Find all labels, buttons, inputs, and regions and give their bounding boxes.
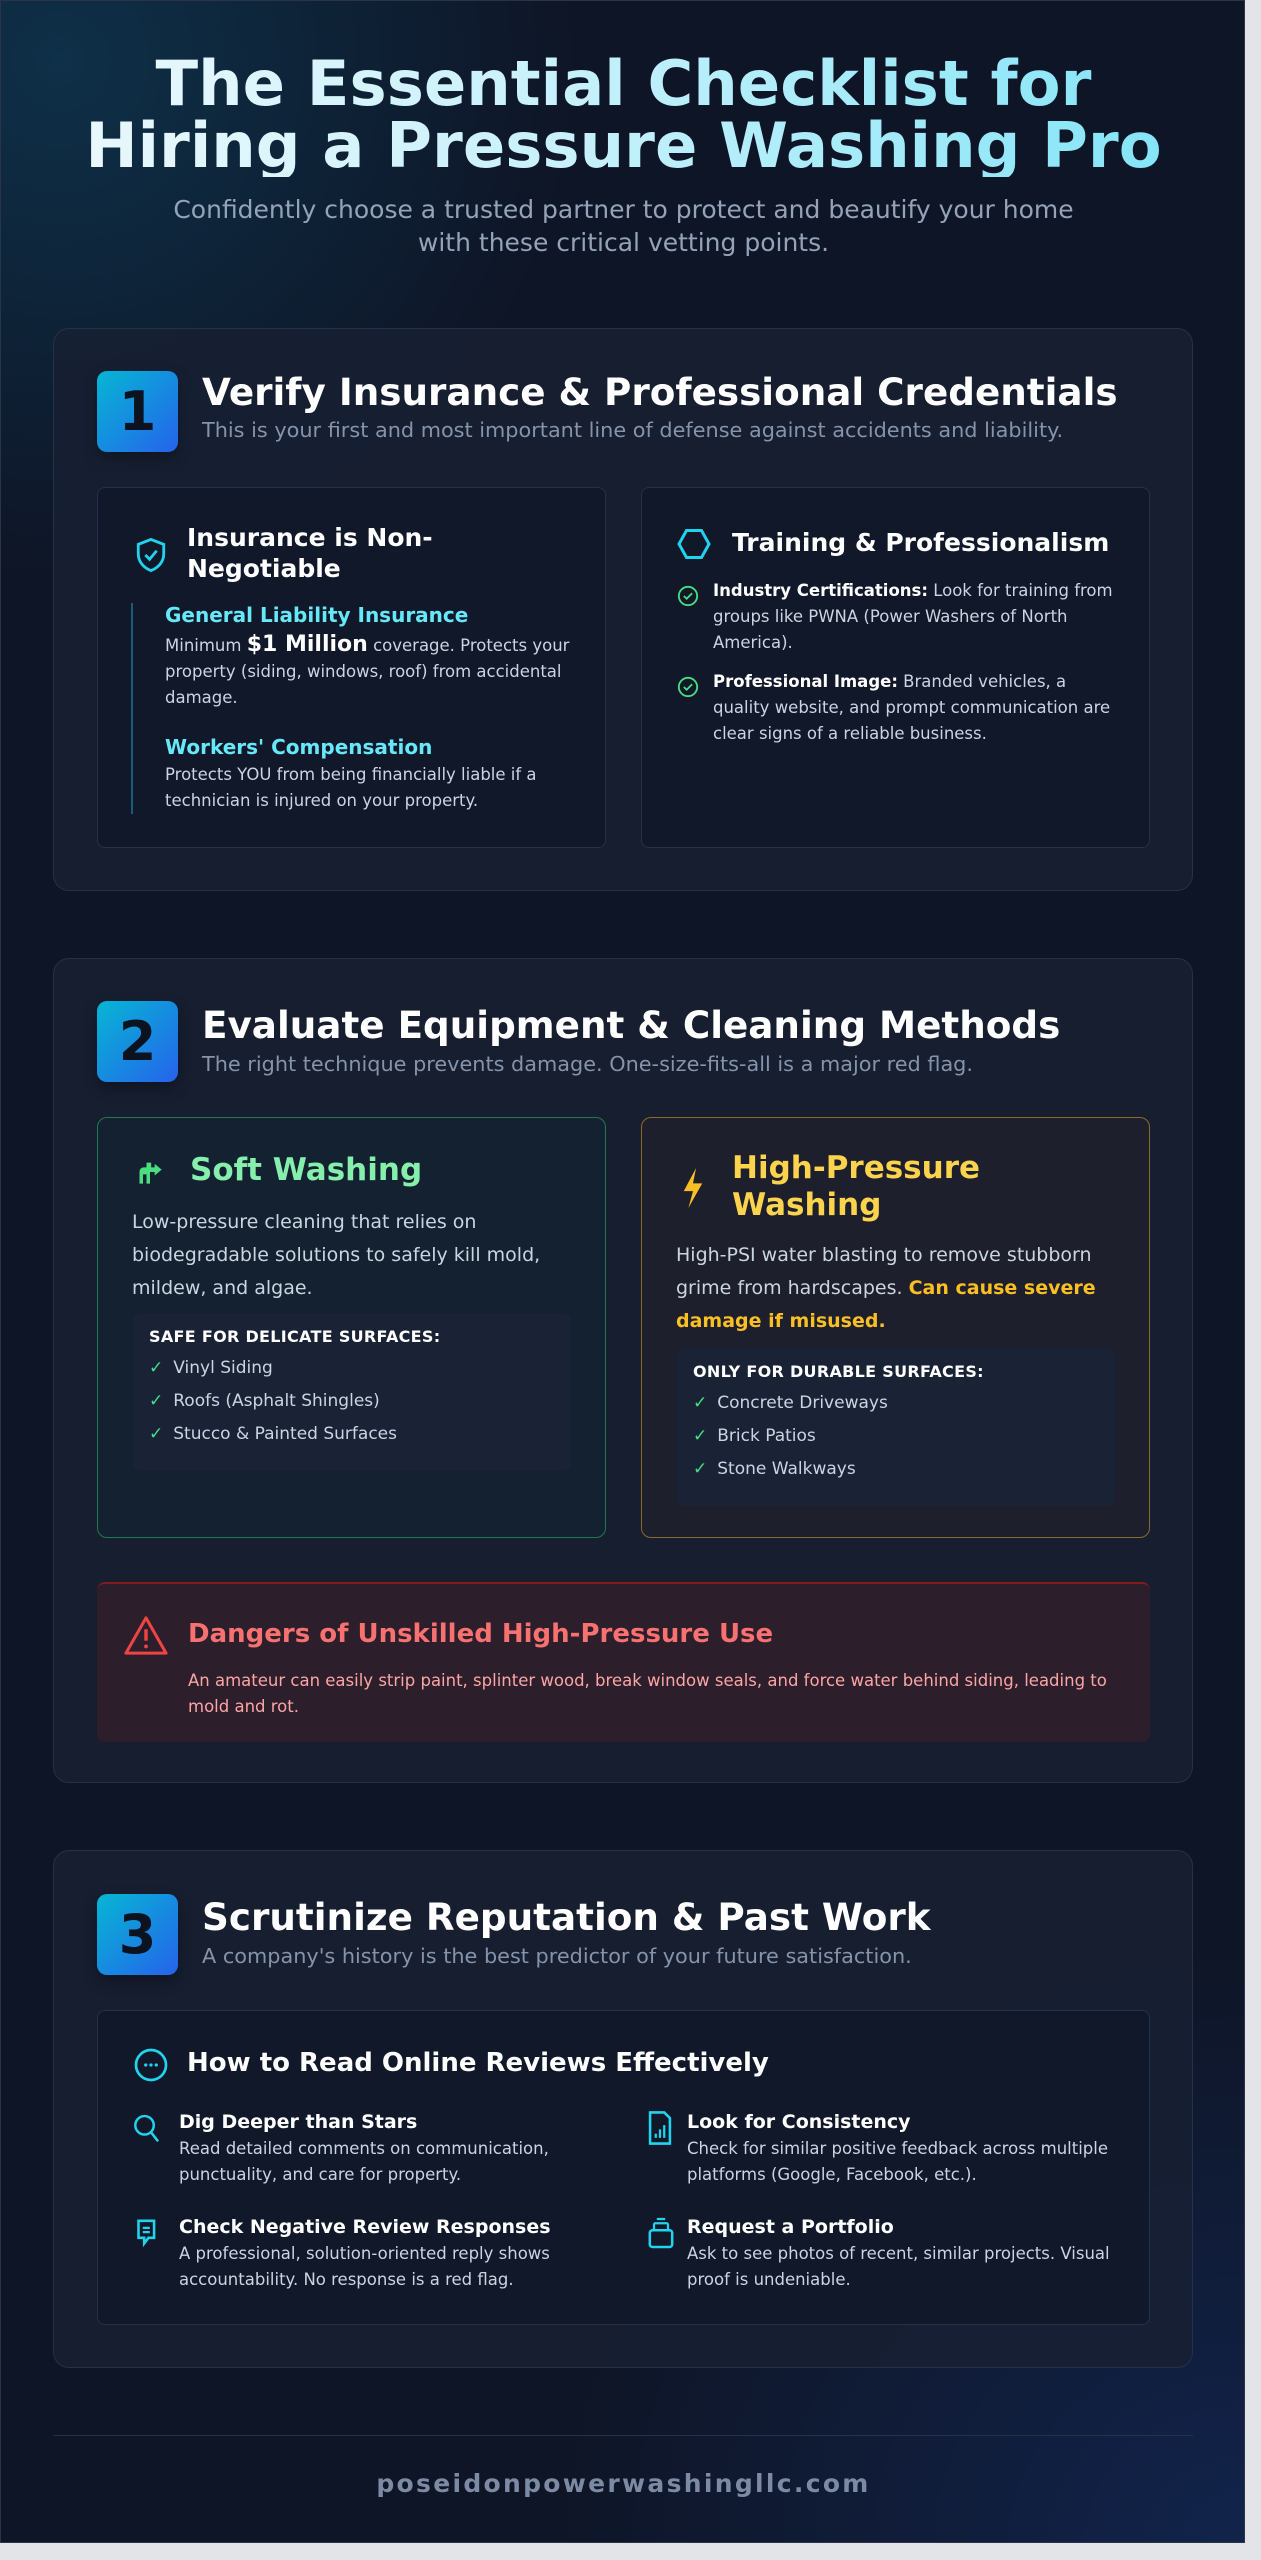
icon: soft wash bbox=[140, 1162, 162, 1184]
heading: high pressure: Washing bbox=[732, 1187, 881, 1223]
heading: high pressure: High-Pressure bbox=[732, 1150, 980, 1186]
list: durable surfaces: ✓ Concrete Driveways bbox=[693, 1393, 888, 1413]
heading: soft washing: Soft Washing bbox=[190, 1152, 422, 1188]
list: delicate surfaces bbox=[133, 1313, 571, 1471]
title: Hiring a Pressure Washing Pro bbox=[85, 109, 1162, 182]
text: workers comp bbox=[165, 735, 537, 810]
list: delicate surfaces: SAFE FOR DELICATE SURFACES: bbox=[149, 1327, 440, 1346]
panel: section 1 credentials bbox=[53, 328, 1193, 891]
item: dig deeper bbox=[134, 2111, 549, 2184]
footer url: poseidonpowerwashingllc.com bbox=[376, 2469, 871, 2498]
heading: reviews: How to Read Online Reviews Effectively bbox=[187, 2048, 769, 2078]
subtitle: Confidently choose a trusted partner to protect and beautify your home bbox=[173, 195, 1074, 224]
item: consistency: Look for Consistency bbox=[687, 2111, 911, 2133]
subheading 3: A company's history is the best predictor of your future satisfaction. bbox=[202, 1944, 912, 1968]
item: negative responses: A professional, solution-oriented reply shows accountability. No response is a red flag. bbox=[179, 2244, 550, 2289]
text: workers comp: Workers' Compensation bbox=[165, 735, 432, 759]
list: delicate surfaces: ✓ Roofs (Asphalt Shingles) bbox=[149, 1391, 380, 1411]
icon: lightning bbox=[684, 1168, 702, 1208]
subheading 1: This is your first and most important line of defense against accidents and liability. bbox=[202, 418, 1063, 442]
callout: dangers bbox=[97, 1582, 1150, 1742]
item: certifications: Industry Certifications: Look for training from groups like PWNA (Power Washers of North America). bbox=[713, 581, 1113, 652]
title bbox=[1, 53, 1246, 177]
list: delicate surfaces: ✓ Vinyl Siding bbox=[149, 1358, 273, 1378]
list: durable surfaces bbox=[677, 1348, 1115, 1506]
icon: shield bbox=[136, 538, 166, 572]
heading: insurance: Insurance is Non- bbox=[187, 523, 433, 552]
text: general liability: General Liability Insurance bbox=[165, 603, 468, 627]
item: professional image: Professional Image: Branded vehicles, a quality website, and prompt communication are clear signs of a reliable business. bbox=[713, 672, 1110, 743]
item: dig deeper: Read detailed comments on communication, punctuality, and care for property. bbox=[179, 2139, 549, 2184]
subheading 2: The right technique prevents damage. One-size-fits-all is a major red flag. bbox=[202, 1052, 973, 1076]
text: workers comp: Protects YOU from being financially liable if a technician is injured on your property. bbox=[165, 765, 537, 810]
list: delicate surfaces: ✓ Stucco & Painted Surfaces bbox=[149, 1424, 397, 1444]
item: negative responses bbox=[137, 2216, 551, 2289]
panel: section 3 reputation bbox=[53, 1850, 1193, 2368]
item: consistency: Check for similar positive feedback across multiple platforms (Google, Facebook, etc.). bbox=[687, 2139, 1108, 2184]
item: negative responses: Check Negative Review Responses bbox=[179, 2216, 551, 2238]
badge 1: 1 bbox=[119, 380, 156, 443]
badge 3: 3 bbox=[119, 1903, 156, 1966]
icon: hexagon bbox=[677, 529, 711, 559]
item: portfolio: Ask to see photos of recent, similar projects. Visual proof is undeniable. bbox=[687, 2244, 1110, 2289]
title: The Essential Checklist for bbox=[156, 47, 1091, 120]
heading: training: Training & Professionalism bbox=[732, 528, 1109, 557]
heading 3: Scrutinize Reputation & Past Work bbox=[202, 1895, 931, 1939]
subtitle bbox=[173, 195, 1074, 257]
panel: reviews bbox=[97, 2010, 1150, 2325]
heading: insurance bbox=[187, 523, 433, 583]
list: durable surfaces: ✓ Brick Patios bbox=[693, 1426, 816, 1446]
icon: warning bbox=[124, 1616, 168, 1655]
badge 3 bbox=[97, 1894, 178, 1975]
panel: insurance bbox=[97, 487, 606, 848]
heading: high pressure bbox=[732, 1150, 980, 1223]
heading: insurance: Negotiable bbox=[187, 554, 341, 583]
badge 2 bbox=[97, 1001, 178, 1082]
item: portfolio bbox=[648, 2216, 1110, 2289]
item: dig deeper: Dig Deeper than Stars bbox=[179, 2111, 417, 2133]
item: consistency bbox=[648, 2111, 1108, 2184]
panel: soft washing bbox=[97, 1117, 606, 1538]
panel: section 2 equipment bbox=[53, 958, 1193, 1783]
panel: training bbox=[641, 487, 1150, 848]
list: durable surfaces: ✓ Stone Walkways bbox=[693, 1459, 856, 1479]
heading 1: Verify Insurance & Professional Credentials bbox=[202, 370, 1118, 414]
item: portfolio: Request a Portfolio bbox=[687, 2216, 894, 2238]
text: general liability: Minimum $1 Million coverage. Protects your property (siding, windows, roof) from accidental damage. bbox=[165, 632, 569, 707]
text: high desc: High-PSI water blasting to remove stubborn grime from hardscapes. Can cause severe damage if misused. bbox=[676, 1244, 1096, 1332]
badge 1 bbox=[97, 371, 178, 452]
text: soft desc: Low-pressure cleaning that relies on biodegradable solutions to safely kill mold, mildew, and algae. bbox=[132, 1211, 540, 1299]
list: durable surfaces: ONLY FOR DURABLE SURFACES: bbox=[693, 1362, 984, 1381]
panel: high pressure bbox=[641, 1117, 1150, 1538]
subtitle: with these critical vetting points. bbox=[418, 228, 829, 257]
badge 2: 2 bbox=[119, 1010, 156, 1073]
text: dangers: An amateur can easily strip paint, splinter wood, break window seals, and force water behind siding, leading to mold and rot. bbox=[188, 1671, 1107, 1716]
icon: chat dots bbox=[134, 2048, 168, 2082]
vertical accent line bbox=[131, 603, 133, 814]
heading 2: Evaluate Equipment & Cleaning Methods bbox=[202, 1003, 1060, 1047]
heading: dangers: Dangers of Unskilled High-Pressure Use bbox=[188, 1619, 773, 1649]
